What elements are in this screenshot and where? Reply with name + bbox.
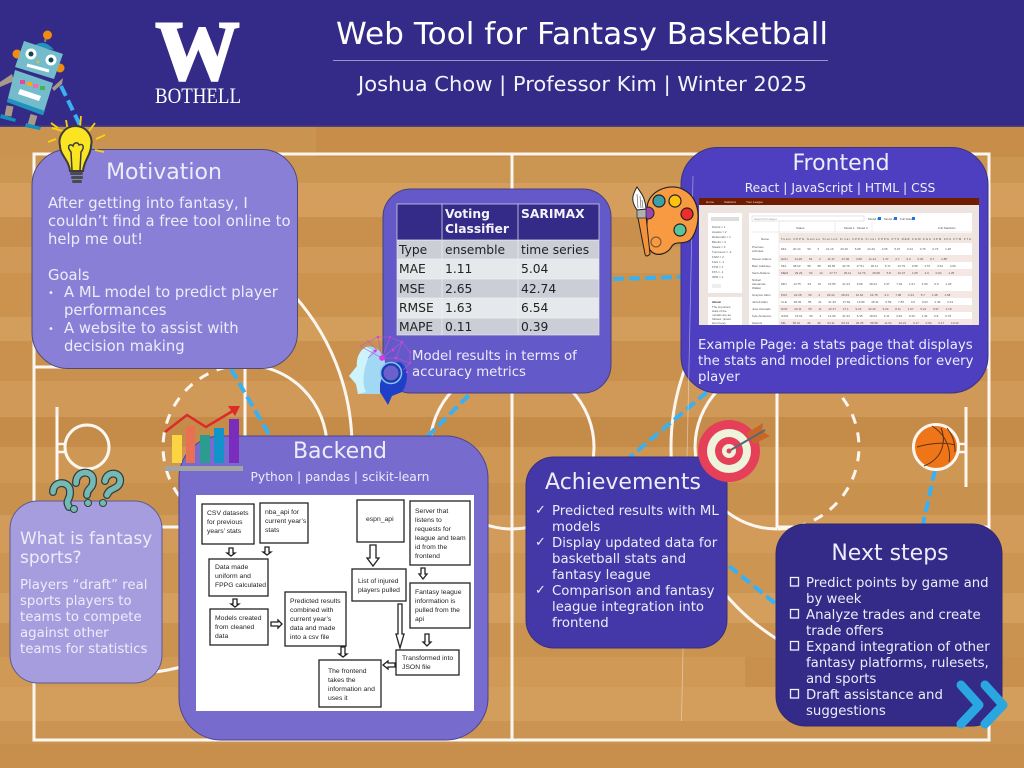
screenshot: stats page: Blocks = 4 [712,240,726,244]
screenshot: stats page: PHX 22.28 50 2 29.42 28.23 10.62 24.78 3.4 7.98 2.44 5.7 1.38 1.68 [781,293,951,297]
title: Web Tool for Fantasy Basketball [336,17,828,52]
list: achievements [535,503,719,631]
flowchart: backend pipeline: uniform and [215,573,251,580]
flowchart: backend pipeline: Server that [415,508,448,515]
flowchart: backend pipeline: JSON file [402,664,431,671]
flowchart: backend pipeline: stats [265,527,280,534]
list: next steps [790,576,990,719]
list: achievements: ✓ [535,583,546,598]
list: next steps: by week [806,592,862,607]
heading: backend: Backend [293,439,387,464]
table: model accuracy metrics: Classifier [445,222,510,236]
screenshot: stats page: GSW 15.61 56 3 14.99 21.32 5.35 18.03 2.11 4.69 0.33 1.46 0.8 0.78 [781,314,951,318]
list: achievements: Comparison and fantasy [552,584,715,599]
heading: what is fantasy sports: What is fantasy [20,529,152,549]
list: next steps: Analyze trades and create [806,608,981,623]
panel: model metrics [383,189,611,393]
screenshot: stats page: Precious [752,245,764,249]
table: model accuracy metrics: 42.74 [521,282,556,296]
arrow: backend to metrics [427,392,472,437]
heading: next steps: Next steps [831,541,949,566]
panel: what is fantasy sports [10,501,162,683]
screenshot: stats page: Model 2 [884,217,895,221]
text: fantasy sports description: Players “draft” real [20,578,147,593]
icon: basketball [914,424,958,470]
arrow: achievements to next steps [729,566,776,604]
heading: what is fantasy sports: sports? [20,548,82,568]
text: fantasy sports description: teams to compete [20,610,142,625]
text: motivation body: performances [64,302,166,319]
text: motivation body: A ML model to predict player [64,284,279,301]
panel: next steps [776,524,1002,726]
list: achievements: ✓ [535,535,546,550]
arrow: metrics to frontend [613,277,681,279]
flowchart: backend pipeline: years’ stats [207,528,242,535]
text: fantasy sports description: teams for statistics [20,642,148,657]
text: fantasy sports description [20,578,148,657]
screenshot: stats page: Search for player [754,217,777,221]
flowchart: backend pipeline: Predicted results [290,598,341,605]
icon: AI head [349,336,411,405]
caption: metrics: accuracy metrics [412,365,526,380]
arrow: motivation to backend [231,369,270,436]
panel: motivation [32,150,298,368]
screenshot: stats page: FGA = -1 [712,260,724,264]
screenshot: stats page: Name [761,237,769,241]
subheading: backend stack: Python | pandas | scikit-learn [251,470,429,485]
screenshot: stats page: Turnovers = -2 [712,250,732,254]
flowchart: backend pipeline: Transformed into [402,655,453,662]
screenshot: stats page: Jose Alvarado [752,307,771,311]
screenshot: stats page: Grayson Allen [752,293,771,297]
flowchart: backend pipeline: league and team [415,535,466,542]
screenshot: stats page: Model 1 [844,226,855,230]
list: next steps: suggestions [806,704,886,719]
screenshot: stats page: Statistics [724,200,737,204]
screenshot: stats page: Rebounds = 1 [712,235,731,239]
flowchart: backend pipeline: CSV datasets [207,510,249,517]
screenshot: stats page: Model 1 [868,217,879,221]
table: model accuracy metrics: 5.04 [521,262,549,276]
screenshot: stats page: Kyle Anderson [752,314,772,318]
text: motivation body: decision making [64,338,185,355]
icon: robot [0,30,64,130]
arrow: frontend to achievements [630,392,707,457]
flowchart: backend pipeline: uses it [328,695,348,702]
screenshot: stats page: Home [706,200,714,204]
screenshot: stats page: Steals = 4 [712,245,726,249]
icon: question marks [53,473,120,512]
table: model accuracy metrics: RMSE [399,301,434,315]
flowchart: backend pipeline: List of injured [358,578,399,585]
table: model accuracy metrics: ensemble [445,243,505,257]
screenshot: stats page: The important [712,305,731,309]
text: fantasy sports description: sports players to [20,594,132,609]
screenshot: stats page: Achiuwa [752,249,764,253]
logo: UW Bothell: BOTHELL [155,83,241,108]
table: model accuracy metrics [397,204,599,335]
header banner [0,0,1024,127]
list: achievements: Predicted results with ML [552,504,719,519]
list: achievements: fantasy league [552,568,651,583]
table: model accuracy metrics: Type [398,243,427,257]
list: next steps: Predict points by game and [806,576,989,591]
heading: frontend: Frontend [792,151,890,176]
table: model accuracy metrics: MSE [399,282,425,296]
screenshot: stats page: Status [796,226,805,230]
table: model accuracy metrics: 1.11 [445,262,472,276]
flowchart: backend pipeline: espn_api [366,516,394,523]
flowchart: backend pipeline: current year’s [290,616,332,623]
text: motivation body: A website to assist with [64,320,239,337]
screenshot: stats page: Full Statistics [938,226,956,230]
screenshot: stats page: Alexander- [752,282,767,286]
table: model accuracy metrics: Voting [445,207,490,221]
flowchart: backend pipeline: Models created [215,615,262,622]
screenshot: stats page: FTM = 1 [712,265,724,269]
screenshot: stats page: item here) [712,321,726,325]
screenshot: stats page: Walker [752,286,761,290]
list: achievements: ✓ [535,503,546,518]
flowchart: backend pipeline: id from the [415,544,447,551]
heading: achievements: Achievements [545,470,701,495]
list: achievements: models [552,520,600,535]
arrow: robot to motivation [61,86,92,150]
flowchart: backend pipeline: frontend [415,553,440,560]
heading: what is fantasy sports [20,529,152,568]
screenshot: stats page: NOP 20.11 56 11 22.37 17.1 9.33 22.43 3.29 8.11 1.67 5.21 0.97 1.18 [781,307,952,311]
screenshot: stats page: 3PM = 1 [712,275,724,279]
table: model accuracy metrics: MAPE [399,320,433,334]
screenshot: stats page: follows: (insert [712,317,731,321]
screenshot: stats page: MIA 20.44 56 6 21.16 20.46 6.68 22.49 2.65 5.07 0.23 0.76 0.79 1.48 [781,247,951,251]
text: motivation body: couldn’t find a free tool online to [48,213,291,230]
flowchart: backend pipeline: Fantasy league [415,589,462,596]
screenshot: stats page: Points = 1 [712,225,726,229]
caption: frontend example: the stats and model predictions for every [698,354,974,369]
flowchart: backend pipeline: api [415,616,425,623]
table: model accuracy metrics: 1.63 [445,301,472,315]
caption: frontend example: player [698,370,740,385]
flowchart: backend pipeline: nba_api for [265,509,300,516]
text: motivation body: help me out! [48,231,143,248]
list: next steps: trade offers [806,624,884,639]
text: motivation body [48,195,291,355]
table: model accuracy metrics: SARIMAX [521,207,585,221]
arrow: basketball to next steps [923,470,935,524]
list: achievements: Display updated data for [552,536,718,551]
text: fantasy sports description: against other [20,626,109,641]
flowchart: backend pipeline: for previous [207,519,243,526]
screenshot: stats page: Bam Adebayo [752,264,771,268]
caption: frontend example: Example Page: a stats page that displays [698,338,973,353]
flowchart: backend pipeline: data and made [290,625,336,632]
flowchart: backend pipeline: into a csv file [290,634,330,641]
list: achievements: league integration into [552,600,704,615]
table: model accuracy metrics: 0.11 [445,320,472,334]
flowchart: backend pipeline: Data made [215,564,248,571]
icon: target [698,420,770,482]
screenshot: stats page: FTA = -1 [712,270,724,274]
list: next steps: fantasy platforms, rulesets, [806,656,989,671]
screenshot: stats page: Full Stats [900,217,913,221]
screenshot: stats page: Your League [746,200,763,204]
screenshot: stats page: Model 2 [857,226,868,230]
screenshot: stats page: Steven Adams [752,257,772,261]
icon: light bulb [48,116,105,183]
screenshot: stats page: HOU 14.28 63 2 11.37 27.06 3.68 11.14 1.37 2.7 0.0 0.02 0.7 1.88 [781,257,947,261]
flowchart: backend pipeline: from cleaned [215,624,255,631]
screenshot: stats page: Team FPPG Games Started Final FPPG Final FPPG PTS REB FGM FGA 3PM 3PA FTM FTA [781,237,971,241]
screenshot: stats page: Jarrett Allen [752,300,768,304]
basketball court lines [34,154,989,740]
screenshot: stats page: Nickeil [752,278,761,282]
flowchart: backend pipeline: information and [328,686,375,693]
flowchart: backend pipeline: The frontend [328,668,367,675]
flowchart: backend pipeline: information is [415,598,456,605]
panel: backend [179,436,488,740]
heading: motivation: Motivation [106,160,222,185]
screenshot: stats page: MIL 56.10 46 46 54.11 60.13 30.35 56.58 11.51 20.21 0.17 0.66 6.17 10.44 [781,321,959,325]
screenshot: stats page [699,198,979,325]
screenshot: stats page: CLE 38.26 55 41 31.49 27.84 13.89 28.11 5.59 7.85 0.0 0.03 2.45 3.23 [781,300,953,304]
list: next steps: Draft assistance and [806,688,943,703]
caption: frontend example [698,338,974,385]
list: achievements: frontend [552,616,609,631]
screenshot: stats page: models are as [712,313,731,317]
caption: metrics [412,349,577,380]
panel: frontend [681,148,988,393]
flowchart: backend pipeline: takes the [328,677,356,684]
screenshot: stats page: Giannis [752,321,763,325]
flowchart: backend pipeline [196,495,474,711]
icon: paint palette [633,187,698,256]
screenshot: stats page: stats of the [712,309,727,313]
flowchart: backend pipeline: current year’s [265,518,307,525]
icon: bar chart with arrow [165,406,243,471]
panel: achievements [526,457,727,648]
screenshot: stats page: FGM = 2 [712,255,724,259]
subtitle: authors: Joshua Chow | Professor Kim | Winter 2025 [356,72,807,96]
screenshot: stats page: About [712,300,721,304]
flowchart: backend pipeline: combined with [290,607,334,614]
logo: UW Bothell: W [156,4,240,98]
flowchart: backend pipeline: players pulled [358,587,400,594]
text: motivation body: • [48,324,54,335]
thin guide line [682,176,693,721]
text: motivation body: After getting into fantasy, I [48,195,248,212]
list: next steps: and sports [806,672,876,687]
caption: metrics: Model results in terms of [412,349,577,364]
flowchart: backend pipeline: requests for [415,526,452,533]
text: motivation body: • [48,288,54,299]
icon: double chevron [961,685,1003,724]
screenshot: stats page: Santi Aldama [752,271,770,275]
subheading: frontend stack: React | JavaScript | HTML | CSS [745,181,935,196]
table: model accuracy metrics: 0.39 [521,320,548,334]
screenshot: stats page: MEM 29.29 52 12 27.77 25.11 12.79 25.68 5.8 10.27 1.65 4.0 0.94 1.35 [781,271,955,275]
flowchart: backend pipeline: data [215,633,228,640]
screenshot: stats page: Assists = 2 [712,230,727,234]
text: motivation body: Goals [48,267,89,284]
table: model accuracy metrics: 2.65 [445,282,472,296]
flowchart: backend pipeline: FPPG calculated [215,582,266,589]
list: achievements: basketball stats and [552,552,686,567]
table: model accuracy metrics: 6.54 [521,301,549,315]
table: model accuracy metrics: time series [521,243,589,257]
flowchart: backend pipeline: pulled from the [415,607,460,614]
list: next steps: Expand integration of other [806,640,990,655]
screenshot: stats page: MIN 13.75 63 10 15.85 21.44 9.68 28.44 3.37 7.94 1.61 4.59 0.9 1.28 [781,282,952,286]
table: model accuracy metrics: MAE [399,262,426,276]
flowchart: backend pipeline: listens to [415,517,442,524]
screenshot: stats page: MIA 38.62 58 58 38.65 40.76 17.51 36.11 6.71 13.79 0.58 2.57 3.62 4.09 [781,264,956,268]
